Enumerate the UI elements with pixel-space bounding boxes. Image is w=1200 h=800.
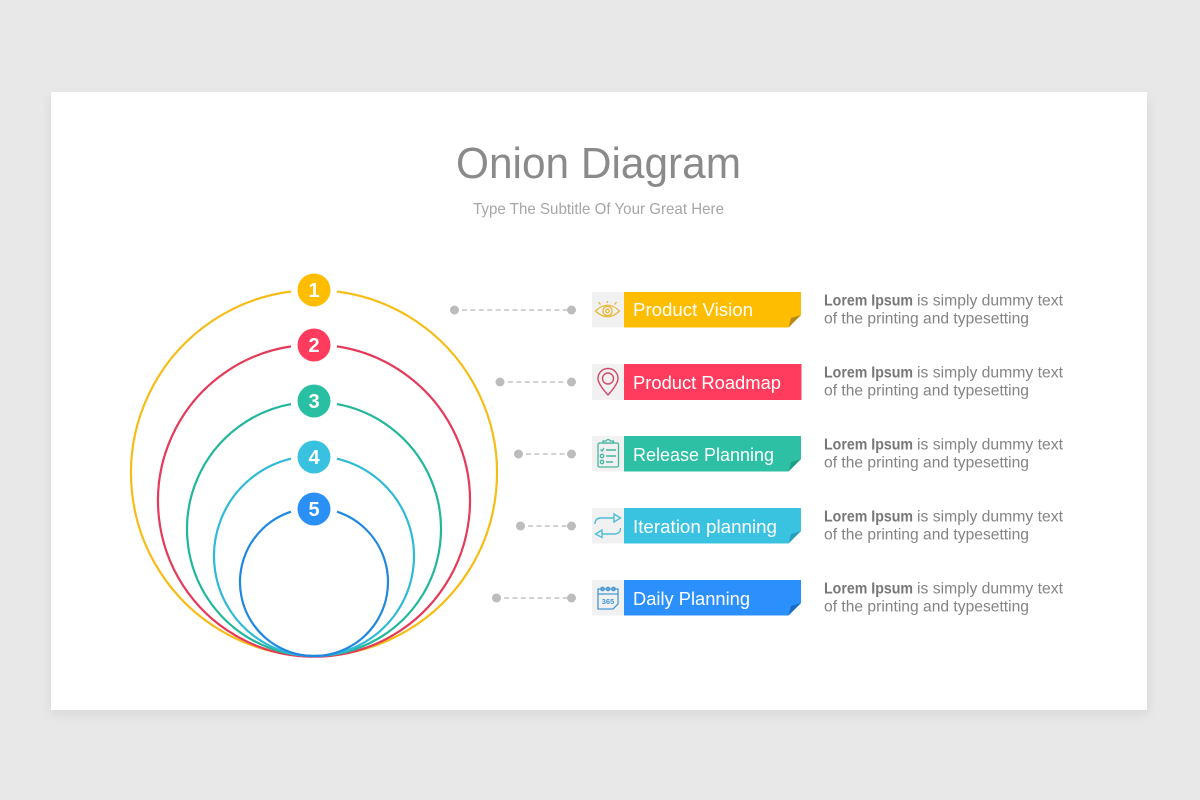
label: Product Roadmap: [624, 364, 802, 400]
connector 1: [450, 306, 576, 314]
text block 3: is simply dummy text: [917, 436, 1064, 454]
ring 3: 3: [308, 391, 320, 413]
icon: calendar 365: 365: [602, 597, 614, 606]
label: Product Vision: Product Vision: [633, 299, 753, 320]
text block 3: of the printing and typesetting: [824, 454, 1029, 472]
onion diagram: [131, 274, 497, 657]
text block 3: Lorem Ipsum: [824, 436, 913, 454]
text block 2: of the printing and typesetting: [824, 382, 1029, 400]
text block 1: Lorem Ipsum: [824, 292, 913, 310]
ring 1: 1: [308, 280, 320, 302]
label: Product Roadmap: Product Roadmap: [633, 372, 781, 393]
ring 4: [214, 440, 414, 656]
text block 4: is simply dummy text: [917, 508, 1064, 526]
text block 5: of the printing and typesetting: [824, 598, 1029, 616]
label: Daily Planning: Daily Planning: [633, 588, 750, 609]
text block 1: of the printing and typesetting: [824, 310, 1029, 328]
text block 1: is simply dummy text: [917, 292, 1064, 310]
ring 5: 5: [308, 499, 320, 521]
label: Iteration planning: [624, 508, 801, 544]
subtitle: Type The Subtitle Of Your Great Here: [473, 201, 724, 218]
text block 4: of the printing and typesetting: [824, 526, 1029, 544]
text block 2: Lorem Ipsum: [824, 364, 913, 382]
text block 4: Lorem Ipsum: [824, 508, 913, 526]
ring 2: 2: [308, 335, 320, 357]
label: Daily Planning: [624, 580, 801, 616]
panel: white slide: [51, 92, 1147, 710]
label: Product Vision: [624, 292, 801, 328]
ring 3: [187, 384, 441, 656]
text block 5: [824, 580, 1064, 616]
text block 3: [824, 436, 1064, 472]
title: Onion Diagram: [456, 140, 741, 188]
text block 2: [824, 364, 1064, 400]
ring 1: [131, 274, 497, 656]
icon: calendar 365: [592, 580, 624, 616]
icon: clipboard checklist: [592, 436, 624, 472]
label: Release Planning: Release Planning: [633, 444, 774, 465]
label: Iteration planning: Iteration planning: [633, 516, 777, 537]
connector 4: [516, 522, 576, 530]
text block 5: is simply dummy text: [917, 580, 1064, 598]
icon: eye: [592, 292, 624, 328]
ring 2: [158, 328, 470, 657]
text block 5: Lorem Ipsum: [824, 580, 913, 598]
text block 4: [824, 508, 1064, 544]
label: Release Planning: [624, 436, 801, 472]
text block 1: [824, 292, 1064, 328]
connector 2: [496, 378, 576, 386]
ring 4: 4: [308, 447, 320, 469]
connector 5: [492, 594, 576, 602]
icon: repeat arrows: [592, 508, 624, 544]
icon: location pin: [592, 364, 624, 400]
connector 3: [514, 450, 576, 458]
text block 2: is simply dummy text: [917, 364, 1064, 382]
ring 5: [240, 492, 388, 656]
